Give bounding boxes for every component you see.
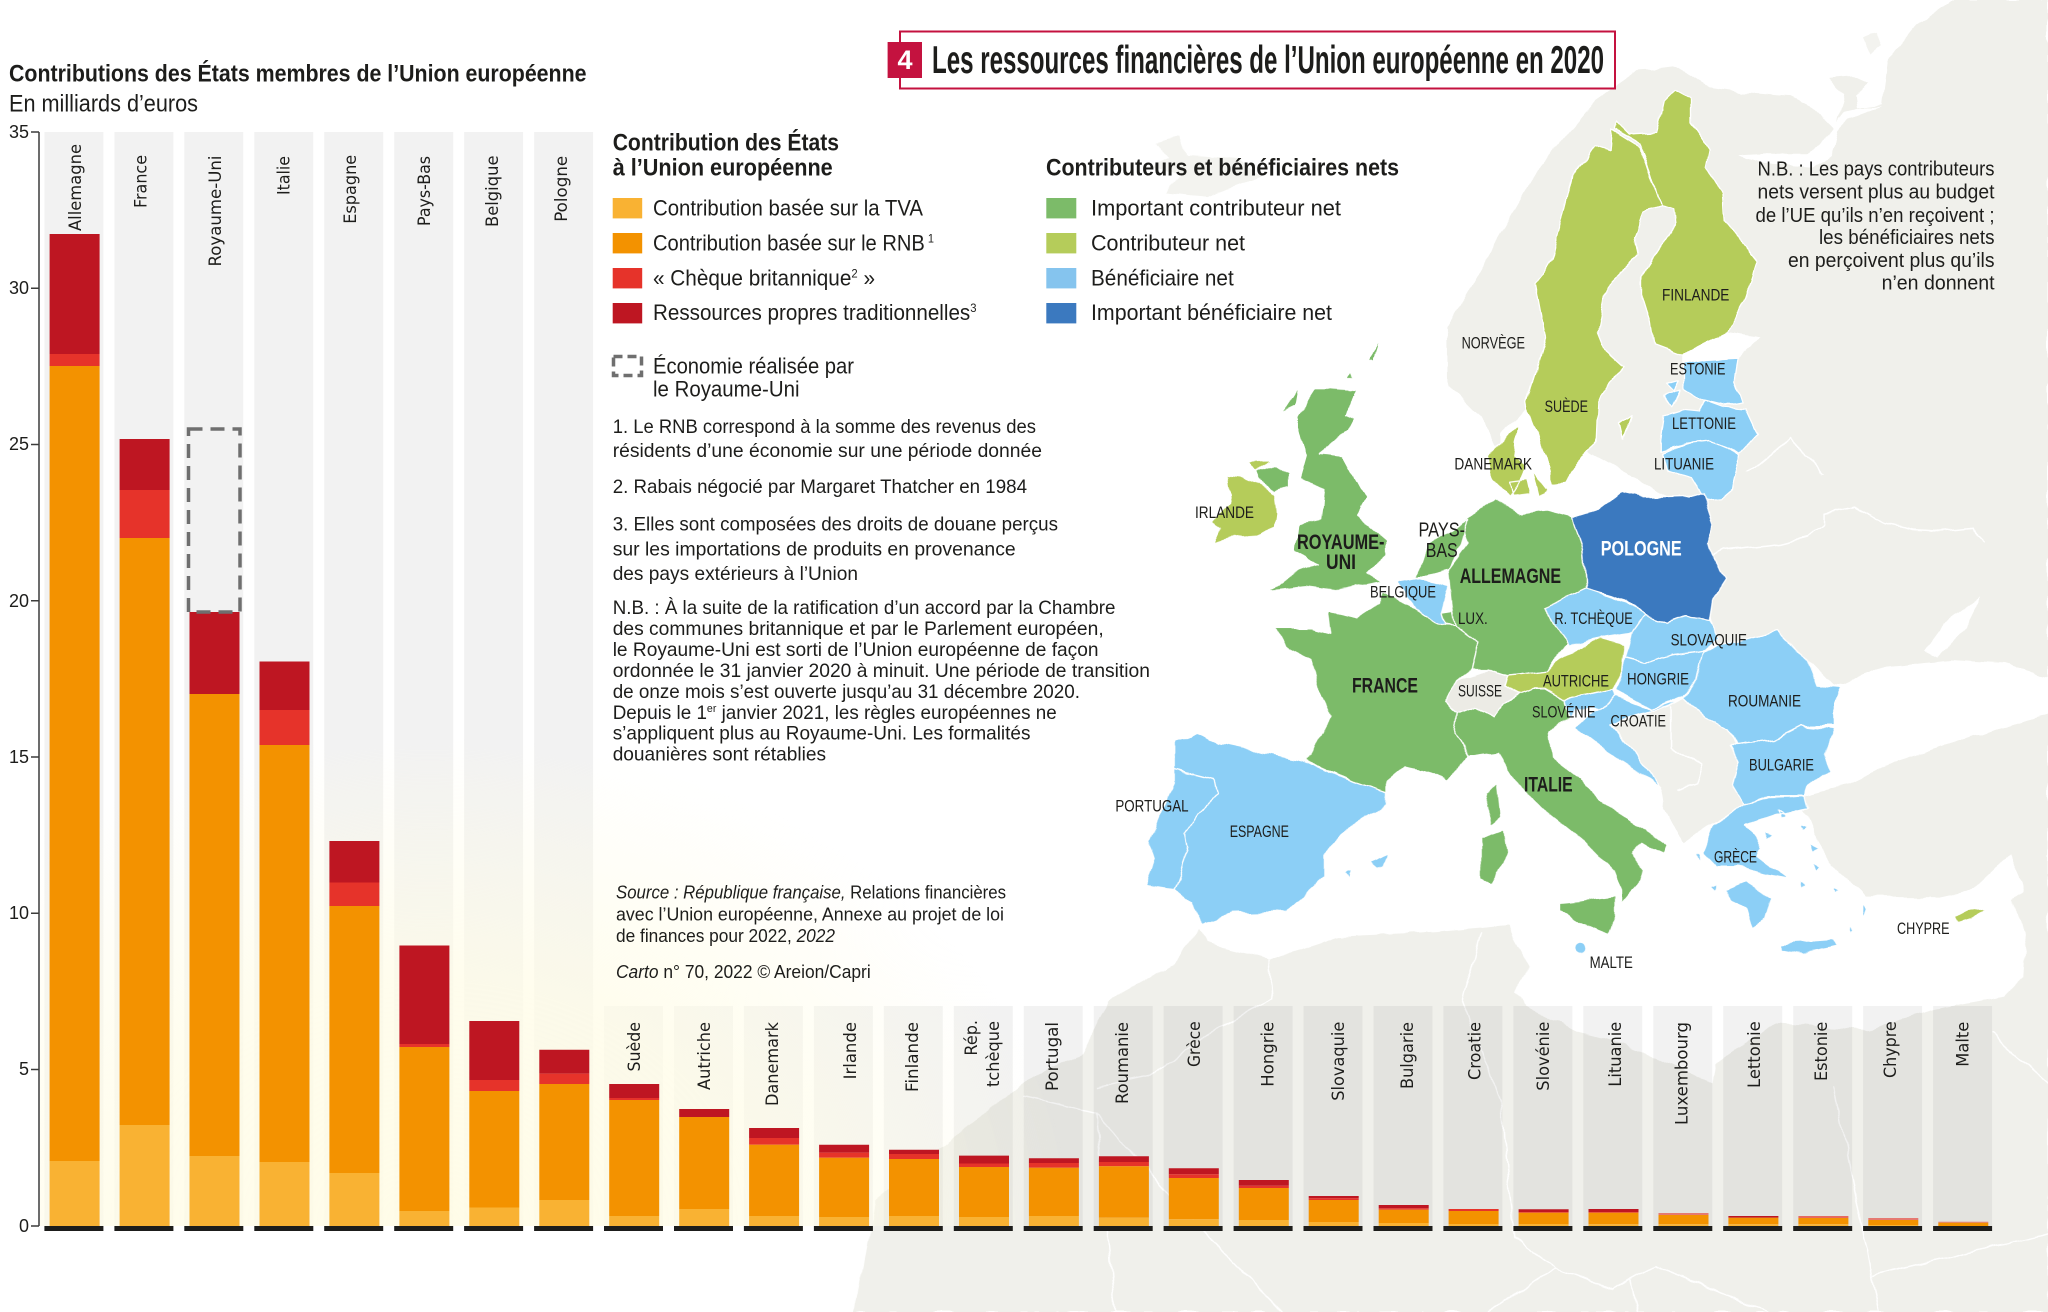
bar: Italie	[260, 662, 310, 1226]
footnotes: sur les importations de produits en provenance	[613, 539, 1016, 561]
country: Bulgarie	[1729, 727, 1834, 805]
map labels: SUÈDE	[1545, 397, 1588, 416]
bar: France	[120, 439, 170, 1226]
map labels: GRÈCE	[1714, 848, 1757, 867]
source: Source : République française, Relations financières	[616, 882, 1006, 903]
chart heading: En milliards d’euros	[9, 91, 198, 118]
legend: net contributors and beneficiaries: Contributeur net	[1091, 231, 1245, 256]
island: Sardaigne	[1481, 828, 1507, 883]
note: net contributors explanation: de l’UE qu’ils n’en reçoivent ;	[1756, 205, 1994, 227]
map labels: HONGRIE	[1627, 670, 1689, 688]
chart: country labels, rotated: Luxembourg	[1673, 1022, 1693, 1125]
bar: Slovénie	[1519, 1209, 1569, 1226]
map labels: ESPAGNE	[1230, 823, 1289, 841]
legend: contributions: 2	[851, 266, 858, 280]
bar: Luxembourg	[1658, 1213, 1708, 1226]
chart heading: Contributions des États membres de l’Union européenne	[9, 60, 586, 88]
legend: net contributors and beneficiaries: Important contributeur net	[1091, 196, 1341, 220]
country: Portugal	[1145, 770, 1217, 890]
source	[616, 882, 1006, 982]
map labels: BAS	[1426, 540, 1458, 562]
bar: Chypre	[1868, 1218, 1918, 1226]
map labels: ITALIE	[1524, 774, 1573, 797]
legend: contributions: »	[858, 265, 875, 290]
note: Brexit: des communes britannique et par le Parlement européen,	[613, 618, 1104, 640]
legend: UK savings: Économie réalisée par	[653, 354, 854, 379]
map labels: DANEMARK	[1454, 456, 1532, 474]
country group: Nordic and Baltic states	[1526, 91, 1757, 502]
legend: UK savings	[614, 354, 854, 402]
bar: Irlande	[819, 1145, 869, 1226]
map labels: CHYPRE	[1897, 920, 1950, 938]
chart: country labels, rotated: Belgique	[483, 156, 503, 227]
map labels: SLOVÉNIE	[1532, 702, 1596, 721]
note: Brexit: de onze mois s’est ouverte jusqu’au 31 décembre 2020.	[613, 681, 1080, 703]
note: Brexit: ordonnée le 31 janvier 2020 à minuit. Une période de transition	[613, 660, 1150, 682]
bar: Grèce	[1169, 1168, 1219, 1226]
chart: country labels, rotated: Croatie	[1466, 1022, 1486, 1080]
chart: country labels, rotated: Chypre	[1881, 1021, 1901, 1078]
note: net contributors explanation: nets versent plus au budget	[1758, 182, 1995, 204]
chart: country labels, rotated: Italie	[274, 156, 294, 195]
note: net contributors explanation: N.B. : Les pays contributeurs	[1758, 159, 1994, 181]
chart: background columns	[44, 132, 1992, 1226]
title: Les ressources financières de l’Union européenne en 2020	[932, 39, 1604, 82]
country: Slovénie	[1566, 690, 1615, 717]
note: Brexit: N.B. : À la suite de la ratification d’un accord par la Chambre	[613, 596, 1116, 619]
island: Gotland	[1619, 414, 1631, 439]
note: Brexit: douanières sont rétablies	[613, 744, 826, 766]
bar: Pologne	[539, 1050, 589, 1226]
bar: Allemagne	[50, 234, 100, 1226]
bar: Portugal	[1029, 1158, 1079, 1226]
map labels: FRANCE	[1352, 675, 1418, 698]
legend: contributions: 1	[925, 232, 934, 246]
note: Brexit: er	[707, 703, 717, 715]
chart: country labels, rotated: Royaume-Uni	[206, 156, 226, 266]
legend: contributions: Contribution des États	[613, 129, 839, 157]
note: Brexit: le Royaume-Uni est sorti de l’Union européenne de façon	[613, 639, 1098, 661]
country: Pologne	[1573, 492, 1726, 623]
country: Luxembourg	[1442, 610, 1455, 626]
map labels: LETTONIE	[1672, 415, 1736, 433]
chart: country labels, rotated: Pologne	[552, 156, 572, 222]
country: Italie	[1455, 688, 1667, 903]
country: Lituanie	[1663, 441, 1741, 502]
legend: net contributors and beneficiaries: Contributeurs et bénéficiaires nets	[1046, 155, 1399, 182]
note: Brexit: Depuis le 1	[613, 702, 710, 724]
bar: République tchèque	[959, 1156, 1009, 1226]
note: net contributors explanation: les bénéficiaires nets	[1819, 227, 1994, 249]
chart: y axis with ticks and values: 5	[19, 1059, 29, 1079]
background land	[855, 0, 2048, 1312]
chart: country labels, rotated: Irlande	[841, 1022, 861, 1079]
island: Sicile	[1560, 897, 1615, 935]
footnotes: 2. Rabais négocié par Margaret Thatcher en 1984	[613, 476, 1027, 498]
bar: Autriche	[679, 1109, 729, 1226]
country: Roumanie	[1684, 630, 1840, 745]
map labels: NORVÈGE	[1462, 334, 1525, 352]
country: République tchèque	[1543, 588, 1644, 647]
note: net contributors explanation	[1756, 159, 1995, 294]
bar: Roumanie	[1099, 1156, 1149, 1226]
chart: country labels, rotated: Lettonie	[1745, 1021, 1765, 1088]
islands: Estonie	[1664, 381, 1680, 407]
chart: y axis with ticks and values: 30	[9, 278, 29, 298]
chart: dashed box for UK rebate	[188, 429, 240, 612]
chart: country labels, rotated: Autriche	[695, 1022, 715, 1090]
source: avec l’Union européenne, Annexe au projet de loi	[616, 903, 1004, 924]
chart: country labels, rotated: Pays-Bas	[415, 156, 435, 226]
chart: country labels, rotated: Portugal	[1043, 1022, 1063, 1091]
legend: contributions: Contribution basée sur le RNB	[653, 231, 950, 256]
chart: stacked bars	[50, 234, 1988, 1226]
bar: Belgique	[469, 1021, 519, 1226]
legend: contributions: Ressources propres traditionnelles	[653, 300, 992, 325]
chart: country labels, rotated: Bulgarie	[1398, 1022, 1418, 1089]
country: Belgique	[1396, 578, 1455, 625]
map labels: SUISSE	[1458, 683, 1502, 701]
bar: Royaume-Uni	[190, 612, 240, 1226]
chart: country labels, rotated: Finlande	[903, 1022, 923, 1092]
map labels: BULGARIE	[1749, 757, 1814, 775]
country group: continental Europe	[1145, 492, 1987, 954]
chart: y axis with ticks and values: 25	[9, 434, 29, 454]
legend: UK savings: le Royaume-Uni	[653, 377, 800, 402]
background land: North Africa	[855, 880, 2048, 1312]
note: net contributors explanation: n’en donnent	[1882, 272, 1995, 294]
map labels: MALTE	[1590, 954, 1633, 972]
bar: Finlande	[889, 1150, 939, 1226]
legend: contributions: « Chèque britannique	[653, 265, 863, 290]
map labels: POLOGNE	[1601, 538, 1682, 561]
island: Corse	[1484, 783, 1501, 825]
country: Chypre	[1955, 907, 1987, 924]
map labels: LITUANIE	[1654, 456, 1714, 474]
chart: country labels, rotated	[66, 144, 1974, 1125]
chart: country labels, rotated: Espagne	[341, 155, 361, 224]
chart: country labels, rotated: Roumanie	[1113, 1022, 1133, 1104]
chart heading	[9, 60, 586, 118]
bar: Lituanie	[1588, 1209, 1638, 1226]
chart: country labels, rotated: Suède	[625, 1022, 645, 1072]
map labels: R. TCHÈQUE	[1554, 609, 1633, 628]
map: EU member states	[1145, 91, 1987, 954]
footnotes	[613, 416, 1058, 585]
country: Allemagne	[1449, 498, 1586, 677]
chart: y axis with ticks and values: 20	[9, 591, 29, 611]
islands: Baléares	[1345, 853, 1388, 880]
legend: net contributors and beneficiaries: Bénéficiaire net	[1091, 265, 1234, 290]
background land: Scandinavia and Russia	[1448, 0, 2048, 548]
title: 4	[897, 45, 913, 75]
country: Suède	[1526, 129, 1661, 484]
map labels: UNI	[1326, 551, 1356, 574]
map labels: PORTUGAL	[1115, 798, 1189, 816]
map labels: FINLANDE	[1662, 286, 1729, 304]
map labels: CROATIE	[1610, 713, 1666, 731]
bar: Danemark	[749, 1128, 799, 1226]
footnotes: des pays extérieurs à l’Union	[613, 563, 858, 585]
map labels: ALLEMAGNE	[1460, 565, 1561, 588]
chart: country labels, rotated: Rép.	[962, 1020, 982, 1056]
chart: country labels, rotated: Malte	[1954, 1022, 1974, 1067]
legend: net contributors and beneficiaries	[1046, 155, 1399, 325]
country: Royaume-Uni	[1256, 339, 1386, 590]
chart: y axis with ticks and values	[9, 122, 39, 1236]
map labels: LUX.	[1458, 610, 1488, 628]
source: de finances pour 2022, 2022	[616, 925, 836, 946]
country: Autriche	[1504, 638, 1625, 700]
bar: Malte	[1938, 1222, 1988, 1226]
bar: Pays-Bas	[399, 946, 449, 1226]
country: Pays-Bas	[1416, 520, 1468, 578]
country: Espagne	[1174, 733, 1386, 924]
chart: country labels, rotated: Danemark	[763, 1022, 783, 1106]
country: Lettonie	[1661, 400, 1757, 453]
country: Grèce	[1693, 797, 1866, 954]
chart: black baseline segments	[44, 1226, 1992, 1231]
country: Hongrie	[1615, 648, 1706, 710]
country group: British Isles and Denmark	[1210, 339, 1550, 590]
bar: Croatie	[1449, 1209, 1499, 1226]
note: Brexit	[613, 596, 1150, 766]
chart: country labels, rotated: Hongrie	[1259, 1022, 1279, 1087]
country: France	[1275, 592, 1481, 793]
map labels: PAYS-	[1418, 519, 1465, 541]
footnotes: résidents d’une économie sur une période donnée	[613, 440, 1042, 462]
country: Estonie	[1683, 358, 1741, 405]
source: Carto n° 70, 2022 © Areion/Capri	[616, 961, 871, 982]
legend: contributions: Contribution basée sur la TVA	[653, 196, 923, 220]
bar: Slovaquie	[1309, 1196, 1359, 1226]
note: Brexit: s’appliquent plus au Royaume-Uni. Les formalités	[613, 723, 1031, 745]
background land: Eastern Europe, Balkans and Turkey	[1612, 473, 2048, 1000]
map labels: ESTONIE	[1670, 360, 1726, 378]
map labels	[1115, 286, 1950, 972]
legend: contributions: à l’Union européenne	[613, 155, 833, 182]
bar: Hongrie	[1239, 1180, 1289, 1226]
chart: country labels, rotated: Slovénie	[1534, 1022, 1554, 1091]
chart: country labels, rotated: Allemagne	[66, 144, 86, 231]
bar: Estonie	[1798, 1216, 1848, 1226]
title	[888, 32, 1615, 88]
legend: contributions	[613, 129, 977, 325]
footnotes: 1. Le RNB correspond à la somme des revenus des	[613, 416, 1036, 438]
chart: country labels, rotated: France	[132, 155, 152, 208]
country: Malte	[1575, 943, 1587, 953]
legend: contributions: 3	[970, 301, 977, 315]
map labels: ROUMANIE	[1728, 693, 1801, 711]
map labels: IRLANDE	[1195, 504, 1254, 522]
map labels: SLOVAQUIE	[1671, 632, 1747, 650]
note: Brexit: janvier 2021, les règles européennes ne	[716, 702, 1057, 724]
chart: country labels, rotated: Grèce	[1185, 1021, 1205, 1067]
chart: country labels, rotated: tchèque	[984, 1021, 1004, 1087]
chart: y axis with ticks and values: 35	[9, 122, 29, 142]
country: Croatie	[1573, 697, 1684, 787]
chart: cream glow behind bars	[40, 736, 1070, 1226]
bar: Bulgarie	[1379, 1205, 1429, 1226]
chart: y axis with ticks and values: 15	[9, 747, 29, 767]
chart: country labels, rotated: Lituanie	[1606, 1022, 1626, 1087]
bar: Espagne	[329, 841, 379, 1226]
map labels: BELGIQUE	[1370, 584, 1436, 602]
bar: Lettonie	[1728, 1216, 1778, 1226]
country: Danemark	[1486, 427, 1550, 498]
country: Irlande	[1210, 460, 1277, 544]
chart: y axis with ticks and values: 10	[9, 903, 29, 923]
note: net contributors explanation: en perçoivent plus qu’ils	[1788, 250, 1994, 272]
country: Finlande	[1615, 91, 1757, 355]
legend: net contributors and beneficiaries: Important bénéficiaire net	[1091, 300, 1332, 325]
footnotes: 3. Elles sont composées des droits de douane perçus	[613, 514, 1058, 536]
country: Suisse	[1445, 670, 1520, 717]
chart: country labels, rotated: Estonie	[1812, 1022, 1832, 1081]
country: Slovaquie	[1625, 615, 1720, 663]
chart: y axis with ticks and values: 0	[19, 1216, 29, 1236]
background land: Iceland	[1151, 136, 1262, 197]
bar: Suède	[609, 1084, 659, 1226]
map labels: ROYAUME-	[1297, 531, 1385, 554]
map labels: AUTRICHE	[1543, 673, 1609, 691]
chart: country labels, rotated: Slovaquie	[1329, 1022, 1349, 1101]
